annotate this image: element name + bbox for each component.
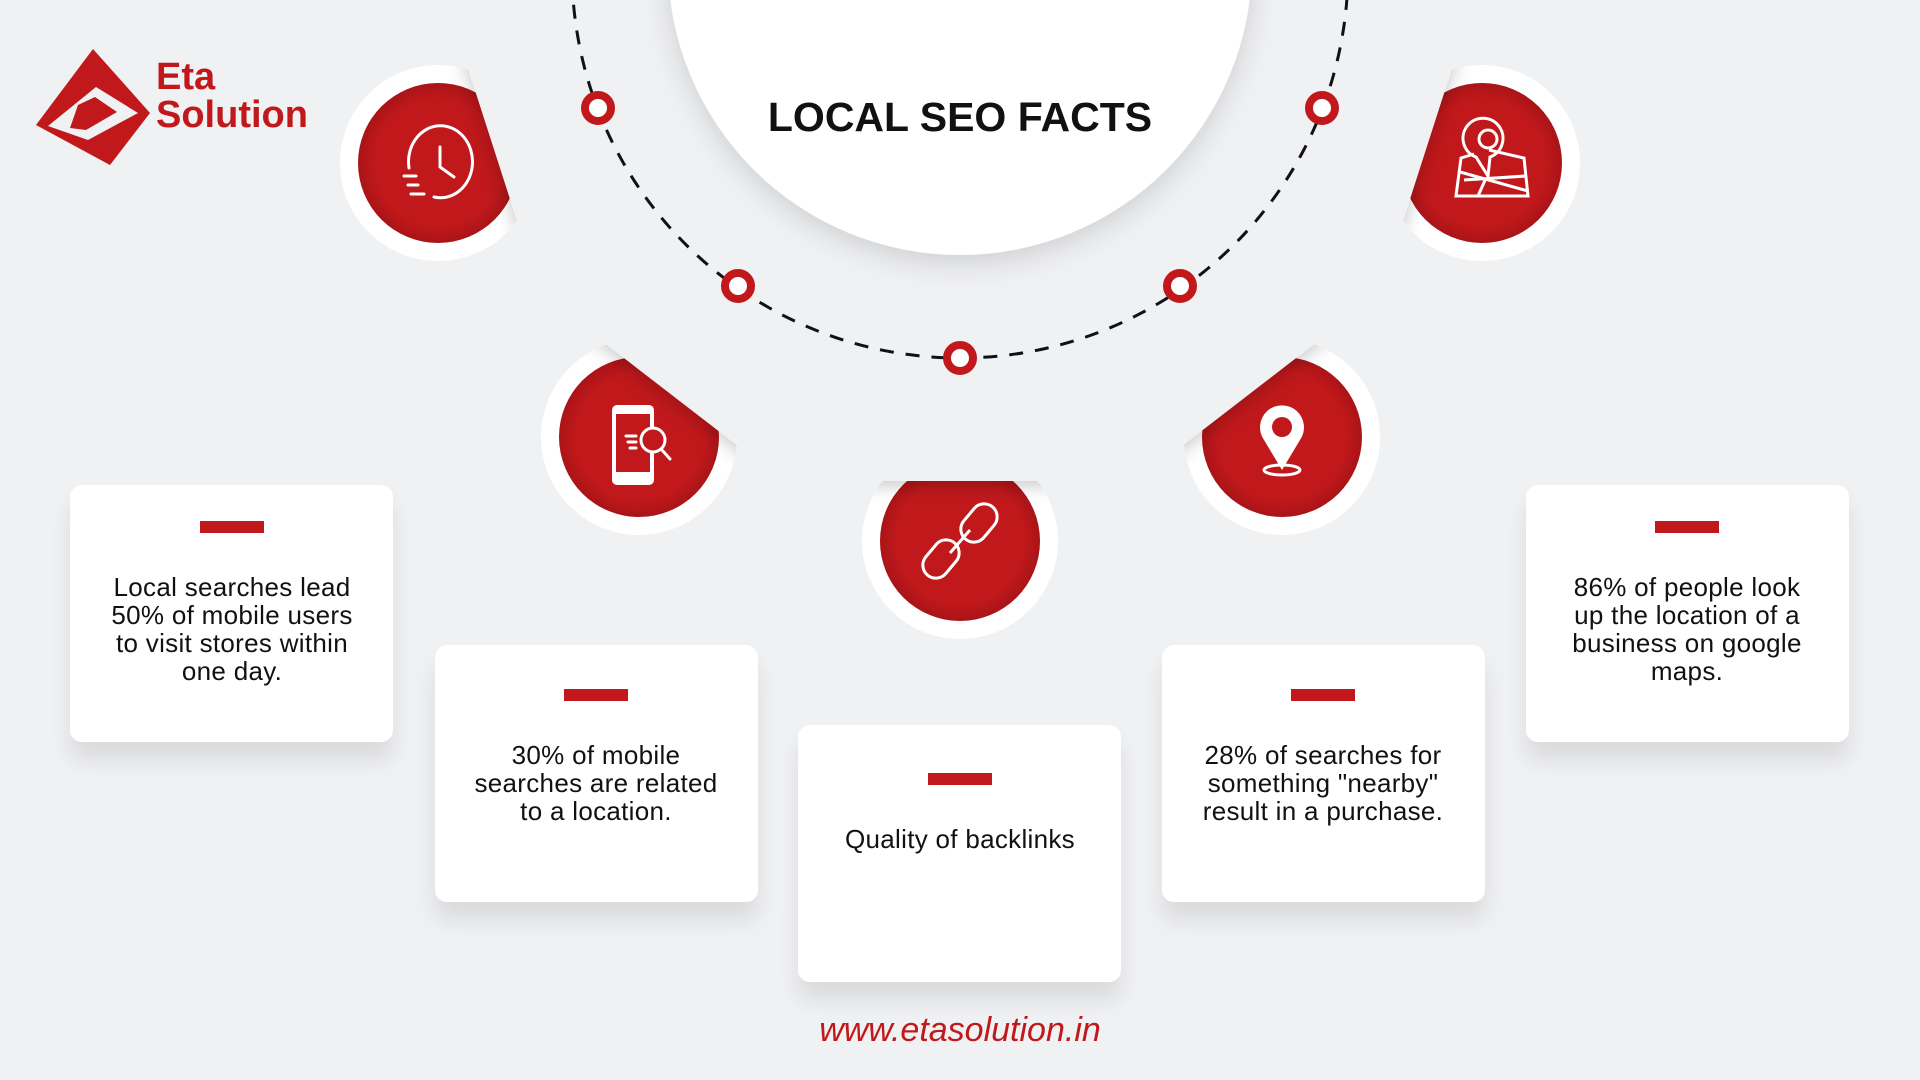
dashed arc with dots <box>572 0 1348 371</box>
icon: pin circle <box>1184 339 1380 535</box>
card 3: Quality of backlinks <box>845 824 1075 854</box>
title circle <box>668 0 1252 255</box>
icon: chain circle <box>862 443 1058 639</box>
card 5: 86% of people look <box>1574 572 1801 602</box>
card 5: up the location of a <box>1574 600 1800 630</box>
icon: clock circle <box>340 65 536 261</box>
card 1: one day. <box>182 656 282 686</box>
icon: phone search circle <box>541 339 737 535</box>
logo: Eta <box>156 56 216 98</box>
logo <box>36 49 308 165</box>
card 4 <box>1162 645 1485 902</box>
card 2: searches are related <box>474 768 718 798</box>
card 4: something "nearby" <box>1208 768 1438 798</box>
card 3 <box>798 725 1121 982</box>
fan backdrop <box>457 67 1463 494</box>
card 4: 28% of searches for <box>1205 740 1442 770</box>
website url: www.etasolution.in <box>819 1011 1101 1049</box>
card 2: to a location. <box>520 796 672 826</box>
card 4: result in a purchase. <box>1203 796 1443 826</box>
icon: map circle <box>1384 65 1580 261</box>
logo: Solution <box>156 94 308 136</box>
card 1: to visit stores within <box>116 628 348 658</box>
card 5: maps. <box>1651 656 1723 686</box>
card 1: Local searches lead <box>114 572 350 602</box>
card 5 <box>1526 485 1849 742</box>
title circle: LOCAL SEO FACTS <box>768 94 1152 140</box>
card 2 <box>435 645 758 902</box>
card 1 <box>70 485 393 742</box>
card 1: 50% of mobile users <box>111 600 353 630</box>
card 5: business on google <box>1572 628 1802 658</box>
card 2: 30% of mobile <box>512 740 680 770</box>
